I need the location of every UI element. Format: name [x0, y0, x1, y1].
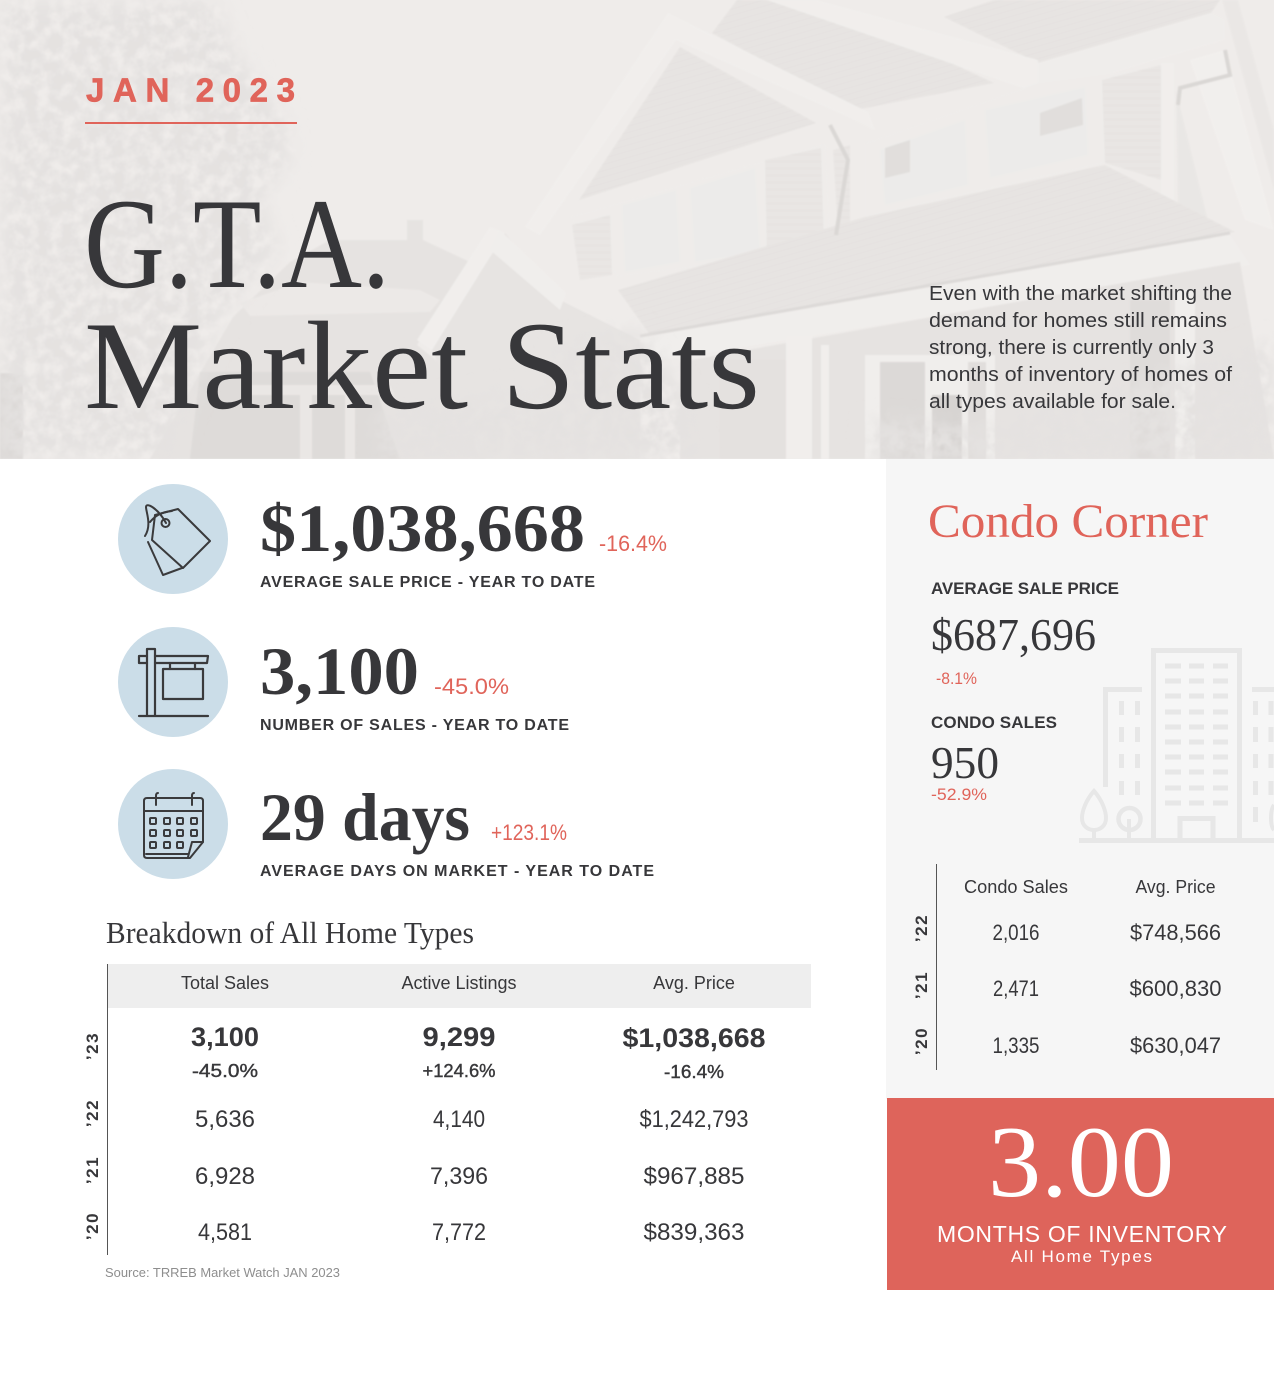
row 2020: ’20 [83, 1212, 102, 1240]
condo row 2021: ’21 [912, 971, 931, 999]
row 2020 [83, 1212, 744, 1246]
row 2021: 6,928 [195, 1163, 255, 1190]
condo table: Condo Sales [964, 877, 1068, 897]
icon: price tags [118, 484, 228, 594]
row 2022: $1,242,793 [640, 1106, 748, 1133]
table header: Active Listings [401, 973, 517, 993]
condo table: Avg. Price [1136, 877, 1216, 897]
row 2021: $967,885 [644, 1163, 744, 1190]
stat: average sale price [118, 484, 667, 594]
row 2021 [83, 1156, 744, 1190]
stat: days on market [118, 769, 654, 880]
condo average price: -8.1% [936, 669, 977, 688]
title [84, 172, 760, 436]
change: -45.0% [434, 674, 509, 699]
icon: real estate sign [118, 627, 228, 737]
date heading: JAN 2023 [86, 72, 295, 108]
row 2023: 3,100 [191, 1022, 259, 1052]
breakdown heading: Breakdown of All Home Types [106, 915, 474, 950]
table header: Total Sales [181, 973, 269, 993]
row 2022: 4,140 [433, 1106, 485, 1133]
row 2023: ’23 [83, 1032, 102, 1060]
condo heading: Condo Corner [928, 495, 1208, 548]
label: AVERAGE DAYS ON MARKET - YEAR TO DATE [260, 863, 654, 880]
title: G.T.A. [84, 172, 390, 315]
row 2022: ’22 [83, 1099, 102, 1127]
condo row 2021: $600,830 [1130, 976, 1222, 1001]
condo row 2020: ’20 [912, 1027, 931, 1055]
condo row 2020: $630,047 [1130, 1033, 1221, 1058]
table header: Avg. Price [653, 973, 735, 993]
row 2022: 5,636 [195, 1106, 255, 1133]
label: NUMBER OF SALES - YEAR TO DATE [260, 717, 569, 734]
change: +123.1% [491, 820, 567, 845]
callout: months of inventory: All Home Types [1011, 1247, 1152, 1266]
row 2020: 4,581 [198, 1219, 252, 1246]
value: $1,038,668 [260, 490, 585, 566]
condo average price: AVERAGE SALE PRICE [931, 579, 1119, 598]
foliage: tree and shrubs [0, 0, 1274, 459]
table: all home types [83, 964, 811, 1255]
hero panel: house photo background [0, 0, 1274, 459]
label: AVERAGE SALE PRICE - YEAR TO DATE [260, 574, 595, 591]
row 2023: -16.4% [664, 1062, 724, 1082]
value: 3,100 [260, 633, 419, 709]
condo row 2022: $748,566 [1130, 920, 1221, 945]
row 2023 [83, 1022, 766, 1082]
row 2023: $1,038,668 [622, 1023, 766, 1053]
condo sales [931, 713, 1057, 804]
intro paragraph: Even with the market shifting the [929, 283, 1232, 305]
condo sales: CONDO SALES [931, 713, 1057, 732]
row 2022 [83, 1099, 748, 1133]
condo row 2022: ’22 [912, 914, 931, 942]
icon: calendar [118, 769, 228, 879]
condo row 2022 [912, 914, 1221, 945]
condo row 2020: 1,335 [992, 1033, 1040, 1058]
row 2020: $839,363 [644, 1219, 744, 1246]
callout: months of inventory: 3.00 [988, 1106, 1174, 1219]
source note: Source: TRREB Market Watch JAN 2023 [105, 1265, 340, 1280]
value: 29 days [260, 779, 470, 855]
callout: months of inventory [887, 1098, 1274, 1290]
stat: number of sales [118, 627, 569, 737]
icon: condo buildings [1079, 650, 1274, 841]
row 2023: 9,299 [422, 1022, 496, 1052]
panel: condo corner [886, 459, 1274, 1099]
condo row 2020 [912, 1027, 1221, 1058]
condo row 2021: 2,471 [993, 976, 1039, 1001]
condo table [912, 864, 1222, 1070]
intro paragraph: months of inventory of homes of [929, 364, 1232, 386]
condo sales: -52.9% [931, 785, 987, 804]
condo average price: $687,696 [931, 609, 1096, 660]
intro paragraph: demand for homes still remains [929, 310, 1227, 332]
change: -16.4% [599, 531, 667, 556]
row 2021: ’21 [83, 1156, 102, 1184]
intro paragraph: strong, there is currently only 3 [929, 337, 1214, 359]
row 2020: 7,772 [432, 1219, 486, 1246]
row 2021: 7,396 [430, 1163, 488, 1190]
condo row 2021 [912, 971, 1222, 1001]
callout: months of inventory: MONTHS OF INVENTORY [937, 1221, 1227, 1247]
row 2023: +124.6% [422, 1061, 496, 1081]
condo sales: 950 [931, 737, 999, 788]
title: Market Stats [84, 297, 760, 436]
condo average price [931, 579, 1119, 688]
condo row 2022: 2,016 [992, 920, 1040, 945]
intro paragraph [929, 283, 1232, 413]
row 2023: -45.0% [192, 1061, 258, 1081]
intro paragraph: all types available for sale. [929, 391, 1176, 413]
table header [108, 964, 811, 1008]
